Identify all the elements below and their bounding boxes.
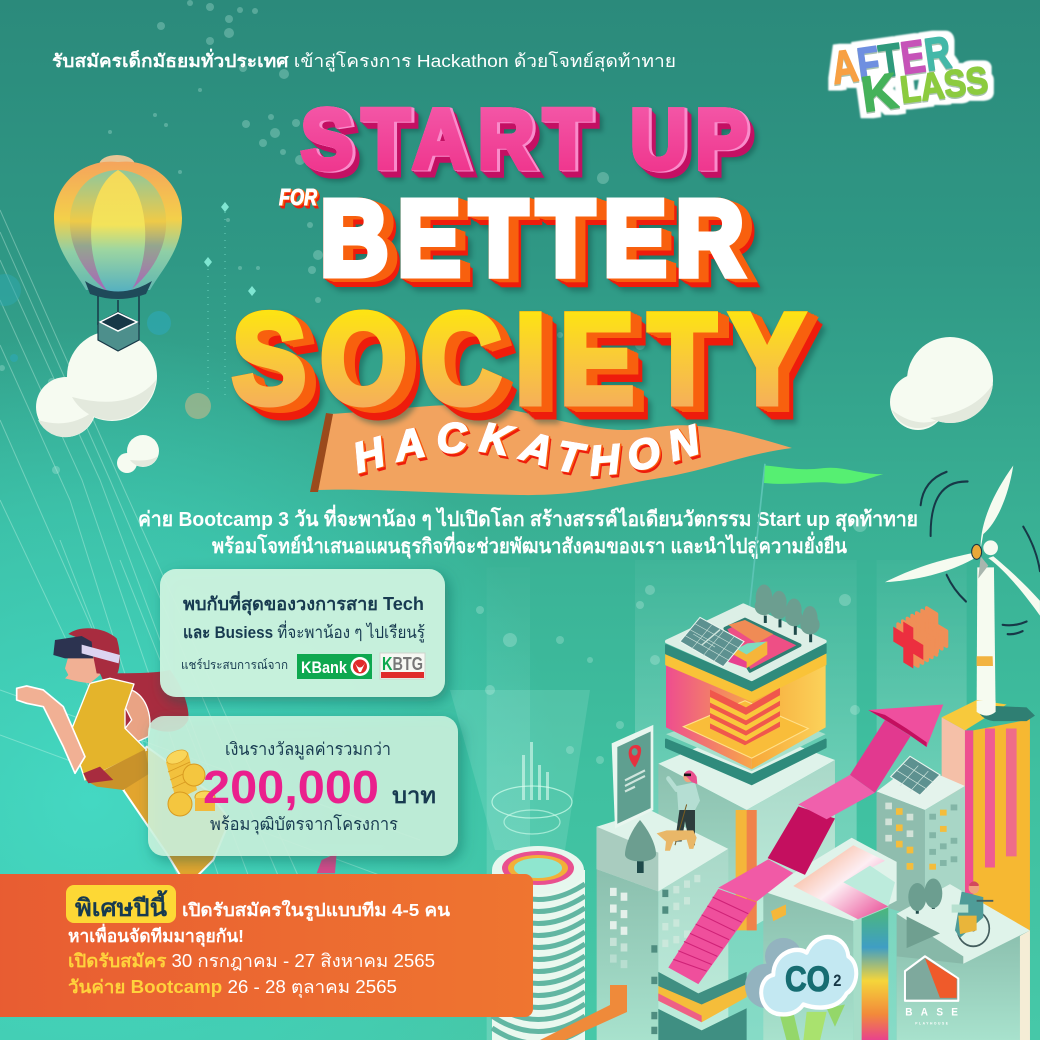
logo: KBank: KBank <box>301 658 347 677</box>
right building <box>877 756 965 927</box>
CO2 cloud <box>745 937 856 1040</box>
title: FOR: FOR <box>279 184 317 210</box>
red cross <box>893 608 947 669</box>
prize amount: 200,000 <box>203 761 379 813</box>
front arm and hand <box>17 686 85 773</box>
background glow lower left <box>0 330 560 1040</box>
subheading: พร้อมโจทย์นำเสนอแผนธุรกิจที่จะช่วยพัฒนาสังคมของเรา และนำไปสู่ความยั่งยืน <box>212 531 847 560</box>
prize intro text: เงินรางวัลมูลค่ารวมกว่า <box>225 739 391 760</box>
rear block <box>658 727 835 930</box>
cloud right <box>890 337 993 430</box>
CO2 cloud: 2 <box>833 972 841 990</box>
team text: เปิดรับสมัครในรูปแบบทีม 4-5 คน <box>182 899 450 922</box>
orange bent arrow <box>540 985 627 1040</box>
yellow tag <box>66 885 176 923</box>
map pin phone <box>612 725 653 829</box>
subheading: ค่าย Bootcamp 3 วัน ที่จะพาน้อง ๆ ไปเปิดโลก สร้างสรรค์ไอเดียนวัตกรรม Start up สุดท้าทาย <box>138 504 918 532</box>
back leg <box>123 747 230 877</box>
logo: After Klass: LASS <box>898 60 990 112</box>
light lines lower left <box>0 210 420 890</box>
hair top <box>68 628 120 675</box>
prize unit: บาท <box>392 783 436 808</box>
base playhouse logo: BASE <box>905 1006 958 1019</box>
wind turbine <box>885 466 1040 716</box>
left block A <box>597 810 728 1040</box>
central lower building <box>763 838 897 1040</box>
logo: After Klass <box>828 26 990 123</box>
right yellow tower <box>942 700 1035 938</box>
bootcamp dates: วันค่าย Bootcamp 26 - 28 ตุลาคม 2565 <box>68 977 397 998</box>
logo: After Klass: K <box>858 62 901 123</box>
striped cylinder tower <box>492 846 585 1040</box>
subheading <box>138 504 918 560</box>
card line three: แชร์ประสบการณ์จาก <box>181 658 288 672</box>
title: SOCIETY: SOCIETY <box>232 288 818 431</box>
title: HACKATHON on wave <box>358 450 710 474</box>
CO2 cloud: CO <box>785 959 830 999</box>
rear right roof block <box>897 884 1030 1040</box>
logo: KBank <box>297 654 372 679</box>
headset strap <box>82 645 120 663</box>
logo: KBTG <box>380 653 425 679</box>
back arm <box>80 690 150 747</box>
text: HACKATHON <box>355 422 701 480</box>
orange notice band <box>0 874 533 1017</box>
base playhouse logo: PLAYHOUSE <box>915 1021 949 1026</box>
card: prize <box>148 716 458 856</box>
light beam and mini chart <box>450 690 590 850</box>
pink shoe <box>317 853 337 873</box>
card line two: และ Busiess ที่จะพาน้อง ๆ ไปเรียนรู้ <box>183 620 425 643</box>
pale background towers <box>487 560 967 1040</box>
cape hair <box>100 670 189 732</box>
shirt <box>70 678 147 780</box>
VR headset <box>53 636 93 658</box>
flag and pole <box>747 464 883 634</box>
small trees right <box>908 879 942 914</box>
solar panels on hub <box>680 617 744 667</box>
turbine base <box>977 701 996 716</box>
registration dates: เปิดรับสมัคร 30 กรกฎาคม - 27 สิงหาคม 2565 <box>68 951 435 971</box>
shorts <box>85 749 150 790</box>
cloud under balloon <box>36 331 157 437</box>
head <box>65 653 100 683</box>
card heading line one: พบกับที่สุดของวงการสาย Tech <box>183 591 424 616</box>
flag banner <box>310 405 792 495</box>
city illustration <box>487 464 1040 1040</box>
title: BETTER: BETTER <box>320 177 753 298</box>
card: experts <box>160 569 445 697</box>
logo: After Klass: AFTER <box>828 26 954 94</box>
hub building <box>666 605 826 784</box>
person in wheelchair <box>952 881 993 946</box>
yellow tag: พิเศษปีนี้ <box>75 889 168 922</box>
logo: KBTG: KBTG <box>382 654 423 674</box>
background particles <box>0 0 867 764</box>
dotted data lines <box>208 212 225 395</box>
sparkles <box>204 202 256 296</box>
title: START UP: START UP <box>301 93 756 187</box>
bottom layered block <box>658 972 747 1040</box>
certificate text: พร้อมวุฒิบัตรจากโครงการ <box>210 814 398 835</box>
invite text: หาเพื่อนจัดทีมมาลุยกัน! <box>68 923 244 947</box>
bokeh circles <box>0 274 211 419</box>
gold coins <box>165 747 215 816</box>
VR runner woman <box>17 628 337 877</box>
tree on block A <box>625 820 656 873</box>
small cloud <box>117 435 159 473</box>
rooftop trees <box>755 584 820 642</box>
hot air balloon <box>54 155 182 351</box>
rising pink stair arrow <box>668 704 943 984</box>
header line: รับสมัครเด็กมัธยมทั่วประเทศ เข้าสู่โครงการ Hackathon ด้วยโจทย์สุดท้าทาย <box>52 48 676 72</box>
base playhouse logo <box>905 956 958 1026</box>
woman and guide dog <box>657 770 700 851</box>
